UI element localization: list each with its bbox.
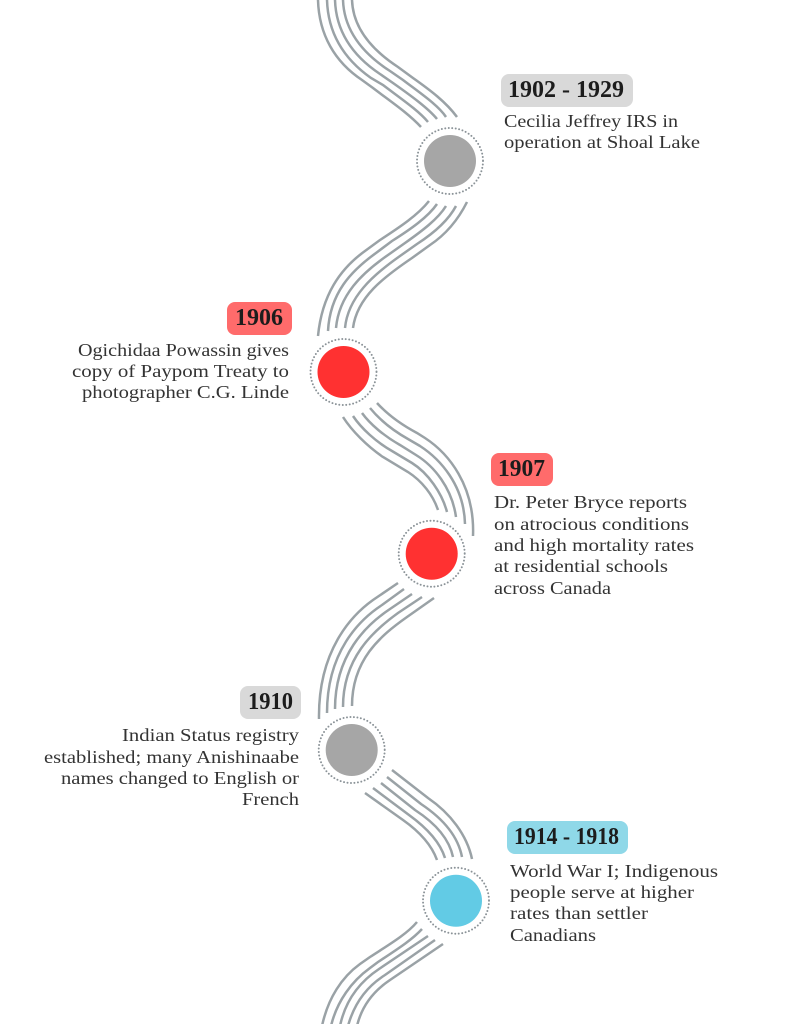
date label: 1910 xyxy=(240,686,301,719)
text: Dr. Peter Bryce description: at residential schools xyxy=(494,556,668,576)
text: Cecilia Jeffrey description xyxy=(504,111,700,152)
text: Indian Status description: established; many Anishinaabe xyxy=(44,747,299,767)
text: Indian Status description: French xyxy=(242,789,299,809)
wavy path: 1910 to 1914 xyxy=(365,770,472,860)
text: Dr. Peter Bryce description: on atrocious conditions xyxy=(494,514,689,534)
text: World War I description: World War I; Indigenous xyxy=(510,861,718,881)
text: World War I description: people serve at higher xyxy=(510,882,694,902)
wavy path: 1907 to 1910 xyxy=(319,583,434,719)
wavy path: top to 1902 xyxy=(318,0,457,127)
text: Indian Status description xyxy=(44,725,299,809)
date label: 1910: 1910 xyxy=(248,689,293,715)
text: Indian Status description: Indian Status registry xyxy=(122,725,299,745)
wavy path: 1914 to bottom xyxy=(322,922,443,1024)
text: World War I description xyxy=(510,861,718,945)
text: Cecilia Jeffrey description: Cecilia Jeffrey IRS in xyxy=(504,111,678,131)
marker: red circle 1906 xyxy=(310,339,376,405)
marker: grey circle 1910 xyxy=(319,717,385,783)
text: Dr. Peter Bryce description: and high mortality rates xyxy=(494,535,694,555)
date label: 1906: 1906 xyxy=(235,305,283,331)
panel: 1906 event xyxy=(72,302,376,405)
date label: 1914 - 1918: 1914 - 1918 xyxy=(514,824,619,850)
text: World War I description: Canadians xyxy=(510,925,596,945)
text: Dr. Peter Bryce description: across Canada xyxy=(494,578,611,598)
wavy path: 1906 to 1907 xyxy=(343,403,473,536)
marker: red circle 1907 xyxy=(399,521,465,587)
text: Indian Status description: names changed to English or xyxy=(61,768,299,788)
date label: 1907 xyxy=(491,453,553,486)
marker: grey circle 1902 xyxy=(417,128,483,194)
date label: 1902 - 1929: 1902 - 1929 xyxy=(508,77,624,103)
text: Ogichidaa Powassin description: copy of Paypom Treaty to xyxy=(72,361,289,381)
date label: 1902 - 1929 xyxy=(501,74,633,107)
text: Ogichidaa Powassin description: photographer C.G. Linde xyxy=(82,382,289,402)
text: World War I description: rates than settler xyxy=(510,903,648,923)
panel: 1907 event xyxy=(399,453,694,598)
wavy path: 1902 to 1906 xyxy=(318,201,467,336)
panel: 1910 event xyxy=(44,686,385,809)
date label: 1906 xyxy=(227,302,292,335)
text: Dr. Peter Bryce description xyxy=(494,492,694,598)
text: Cecilia Jeffrey description: operation at Shoal Lake xyxy=(504,132,700,152)
date label: 1907: 1907 xyxy=(498,456,545,482)
panel: 1902 - 1929 event xyxy=(417,74,700,194)
text: Dr. Peter Bryce description: Dr. Peter Bryce reports xyxy=(494,492,687,512)
marker: blue circle 1914 xyxy=(423,868,489,934)
text: Ogichidaa Powassin description: Ogichidaa Powassin gives xyxy=(78,340,289,360)
panel: 1914 - 1918 event xyxy=(423,821,718,945)
text: Ogichidaa Powassin description xyxy=(72,340,289,402)
